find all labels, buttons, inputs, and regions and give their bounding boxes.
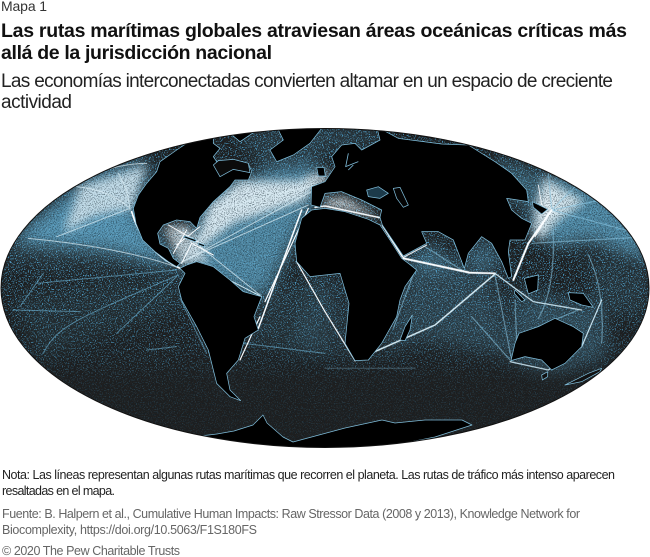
note xyxy=(2,468,615,498)
Eurasia xyxy=(311,127,532,278)
Hudson Bay outline xyxy=(213,159,250,177)
traffic density glow: Asia and Indian Ocean side xyxy=(292,130,650,373)
ocean background xyxy=(1,128,649,448)
subtitle: actividad xyxy=(1,92,72,113)
title xyxy=(1,20,627,64)
subtitle: Las economías interconectadas convierten altamar en un espacio de creciente xyxy=(1,71,613,92)
South America xyxy=(178,262,262,401)
source: Fuente: B. Halpern et al., Cumulative Human Impacts: Raw Stressor Data (2008 y 2013), Knowledge Network for xyxy=(2,507,580,521)
Greenland xyxy=(270,127,322,162)
source: Biocomplexity, https://doi.org/10.5063/F1S180FS xyxy=(2,523,257,537)
traffic density glow: Americas side xyxy=(0,130,325,360)
note: Nota: Las líneas representan algunas rutas marítimas que recorren el planeta. Las rutas de tráfico más intenso aparecen xyxy=(2,468,615,482)
title: allá de la jurisdicción nacional xyxy=(1,42,272,64)
Baltic Sea outline xyxy=(346,153,358,170)
Borneo xyxy=(524,275,538,294)
British Isles xyxy=(317,167,325,176)
continents: Americas, Greenland, British Isles xyxy=(133,123,325,401)
New Zealand xyxy=(542,368,602,385)
title: Las rutas marítimas globales atraviesan áreas oceánicas críticas más xyxy=(1,20,627,42)
Africa xyxy=(295,208,417,361)
Australia xyxy=(511,318,583,370)
subtitle xyxy=(1,71,613,113)
source xyxy=(2,507,580,537)
North America xyxy=(133,123,253,267)
New Guinea xyxy=(568,293,593,307)
world shipping routes map xyxy=(0,123,650,470)
ocean traffic speckle xyxy=(0,128,650,448)
Antarctica xyxy=(202,414,472,447)
globe edge xyxy=(1,128,649,448)
Sumatra xyxy=(514,290,525,302)
Japan xyxy=(532,202,548,214)
Madagascar xyxy=(400,315,412,341)
Black Sea xyxy=(367,187,388,198)
shipping lanes: Americas side xyxy=(13,163,325,360)
Cuba and Caribbean islands xyxy=(183,236,205,247)
faint mottling over glow xyxy=(0,128,650,448)
shipping lanes: Asia and Indian Ocean side xyxy=(315,173,650,370)
note: resaltadas en el mapa. xyxy=(2,484,115,498)
continents: Africa, Eurasia, Australia xyxy=(295,127,602,385)
Caspian Sea xyxy=(393,187,408,207)
